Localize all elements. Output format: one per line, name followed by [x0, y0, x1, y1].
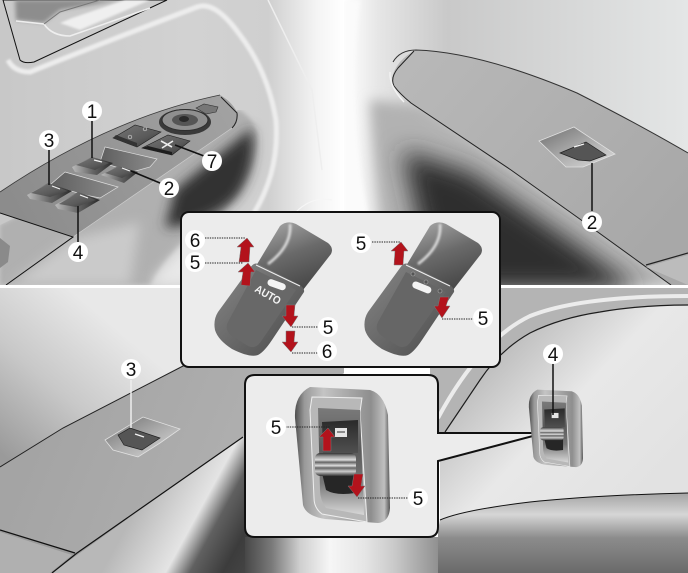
label 5 window top [266, 417, 286, 439]
callout leader lines [49, 118, 592, 415]
leader lines lower [285, 427, 410, 498]
dark pocket [402, 150, 640, 290]
label 2 right [582, 212, 602, 234]
grey below panel [370, 100, 680, 285]
label 4 right [543, 344, 563, 366]
inset: rocker switch detail [181, 212, 500, 367]
white separator band [0, 285, 688, 288]
armrest cup [0, 238, 10, 268]
label 6 lower [317, 341, 337, 363]
label 5 window top: 5 [271, 418, 281, 439]
armrest right [438, 493, 688, 573]
label 5 right lower [473, 308, 493, 330]
window control panel [392, 50, 688, 285]
label 2 left [159, 178, 179, 200]
label 1 [82, 101, 102, 123]
label 3 top [39, 130, 59, 152]
label 6 upper: 6 [190, 231, 200, 252]
label 4 right: 4 [548, 345, 559, 366]
label 3 bottom: 3 [126, 360, 136, 381]
switch with AUTO [214, 222, 332, 356]
panel: driver door top-left [0, 0, 344, 285]
window icon [335, 428, 347, 437]
label 5 middle: 5 [323, 318, 333, 339]
soft curve near seam [361, 192, 367, 211]
switch panel [0, 95, 238, 237]
door trim band [8, 6, 277, 213]
button 7 window lock [142, 135, 190, 155]
mirror fold button [196, 104, 218, 114]
armrest lower left [52, 432, 260, 573]
small window switch 4 [529, 390, 583, 467]
button recesses [100, 147, 157, 172]
label 5 middle [318, 317, 338, 339]
panel: passenger door top-right [344, 0, 688, 290]
enlarged window switch [295, 387, 390, 523]
label 7: 7 [207, 152, 217, 173]
number labels [39, 101, 602, 510]
red arrows lower [319, 428, 365, 497]
label 4 left [68, 242, 88, 264]
label 2 left: 2 [164, 179, 174, 200]
label 5 right lower: 5 [478, 309, 488, 330]
switch 2 bezel [539, 127, 615, 167]
switch 3 bezel [105, 417, 180, 457]
mirror knob [159, 109, 211, 135]
leader lines [205, 238, 475, 353]
red arrows [237, 238, 450, 352]
button 3 [27, 183, 72, 203]
label 6 lower: 6 [322, 342, 332, 363]
callout leader line 3 light [130, 380, 132, 428]
door lock switch [113, 125, 161, 147]
label 6 upper [185, 230, 205, 252]
armrest [0, 108, 257, 285]
button 1 [72, 157, 113, 175]
label 7 [202, 151, 222, 173]
switch with AUTO: AUTO [252, 283, 283, 308]
panel: bottom-left door [0, 288, 440, 573]
lower centre gradient [245, 537, 440, 573]
panel: bottom-right door [430, 288, 688, 573]
label 3 bottom [121, 359, 141, 381]
label 4 left: 4 [73, 243, 84, 264]
side trim lines [268, 0, 322, 170]
inset: lower window switch detail [245, 375, 533, 537]
label 5 upper [185, 252, 205, 274]
window switch panel left [0, 365, 344, 553]
window frame band [430, 288, 688, 432]
label 3 top: 3 [44, 131, 54, 152]
button 2 [101, 166, 138, 183]
switch without AUTO [364, 222, 482, 356]
label 5 right upper: 5 [356, 234, 366, 255]
label 5 upper: 5 [190, 253, 200, 274]
label 5 window bottom [408, 488, 428, 510]
door handle recess [3, 0, 167, 63]
label 5 right upper [351, 233, 371, 255]
button 4 [55, 192, 100, 213]
label 5 window bottom: 5 [413, 489, 423, 510]
label 2 right: 2 [587, 213, 597, 234]
label 1: 1 [87, 102, 97, 123]
